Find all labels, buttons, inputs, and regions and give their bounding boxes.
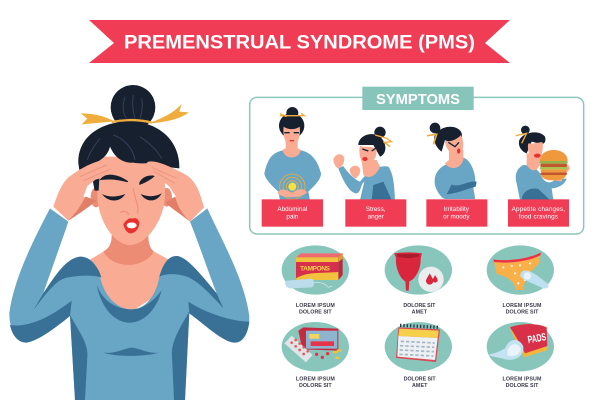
text: item 4 caption: DOLORE SIT bbox=[299, 383, 332, 389]
text: item 3 caption bbox=[502, 303, 542, 316]
label: stress, anger: Stress, bbox=[366, 206, 386, 213]
text: item 5 caption: AMET bbox=[412, 383, 428, 389]
symptom figure: irritability bbox=[427, 123, 477, 199]
text: item 1 caption: DOLORE SIT bbox=[299, 310, 332, 316]
text: item 3 caption: DOLORE SIT bbox=[506, 310, 539, 316]
title: PREMENSTRUAL SYNDROME (PMS) bbox=[124, 32, 475, 54]
label: irritability or moody: Irritability bbox=[444, 206, 470, 213]
text: item 6 caption: LOREM IPSUM bbox=[502, 376, 542, 382]
symptom figure: stress, anger bbox=[333, 127, 395, 200]
label: abdominal pain: Abdominal bbox=[277, 206, 307, 213]
panel: symptoms bbox=[250, 87, 584, 234]
symptoms heading bbox=[362, 87, 474, 110]
title banner bbox=[89, 20, 510, 63]
label: appetite changes, food cravings: Appetite changes, bbox=[512, 206, 565, 213]
text: item 6 caption bbox=[502, 376, 542, 389]
text: item 5 caption bbox=[404, 376, 436, 389]
item: calendar bbox=[385, 322, 452, 371]
item: pads: PADS bbox=[527, 331, 547, 346]
text: item 4 caption bbox=[296, 376, 335, 389]
text: item 2 caption: DOLORE SIT bbox=[403, 303, 436, 309]
text: item 5 caption: DOLORE SIT bbox=[404, 376, 436, 382]
label: appetite changes, food cravings: food cravings bbox=[519, 214, 558, 221]
body and sweater bbox=[9, 208, 249, 400]
item: tampons: TAMPONS bbox=[300, 266, 331, 273]
item: menstrual cup bbox=[385, 245, 452, 295]
label: irritability or moody bbox=[426, 199, 487, 227]
text: item 3 caption: LOREM IPSUM bbox=[502, 303, 542, 309]
symptom figure: abdominal pain bbox=[264, 107, 321, 200]
label: stress, anger: anger bbox=[368, 214, 384, 221]
hair bun with ribbon bbox=[81, 85, 189, 130]
text: item 1 caption bbox=[296, 303, 335, 316]
head and face bbox=[78, 122, 179, 245]
label: abdominal pain bbox=[262, 199, 323, 227]
products grid bbox=[282, 245, 554, 389]
item: tampons bbox=[282, 245, 349, 295]
item: pills bbox=[282, 322, 349, 371]
text: item 4 caption: LOREM IPSUM bbox=[296, 376, 335, 382]
label: abdominal pain: pain bbox=[286, 214, 299, 221]
symptom figure: appetite changes with burger bbox=[516, 126, 570, 200]
text: item 2 caption: AMET bbox=[412, 310, 428, 316]
text: item 2 caption bbox=[403, 303, 436, 316]
main illustration: woman with headache bbox=[9, 85, 249, 400]
label: irritability or moody: or moody bbox=[443, 214, 470, 221]
label: stress, anger bbox=[345, 199, 406, 227]
item: underwear with liner bbox=[487, 245, 554, 295]
hands on temples bbox=[53, 159, 204, 222]
label: appetite changes, food cravings bbox=[508, 199, 569, 227]
text: item 1 caption: LOREM IPSUM bbox=[296, 303, 335, 309]
item: pads bbox=[487, 322, 554, 371]
text: item 6 caption: DOLORE SIT bbox=[506, 383, 539, 389]
symptoms heading: SYMPTOMS bbox=[376, 91, 460, 108]
